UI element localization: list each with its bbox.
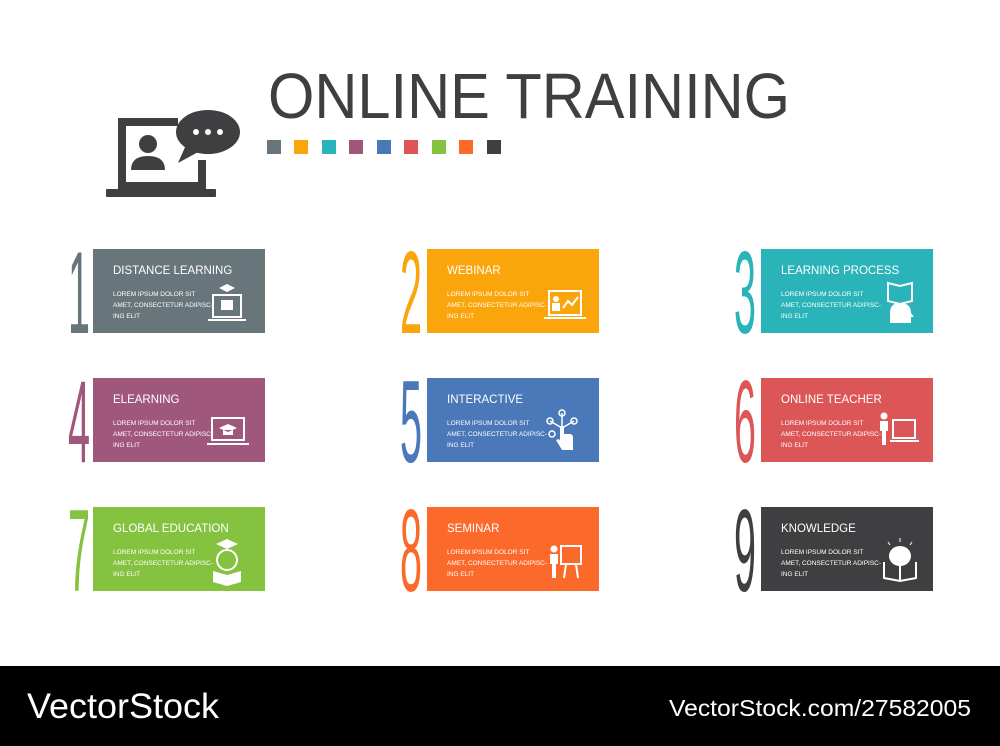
color squares legend bbox=[267, 140, 501, 154]
panel: 1 distance learning: ING ELIT bbox=[113, 313, 140, 320]
panel: 8 seminar bbox=[400, 485, 599, 616]
panel: 7 global education: LOREM IPSUM DOLOR SIT bbox=[113, 549, 195, 556]
panel: 8 seminar: ING ELIT bbox=[447, 571, 474, 578]
icon bbox=[547, 410, 577, 437]
panel: 7 global education: ING ELIT bbox=[113, 571, 140, 578]
panel: 5 interactive: AMET, CONSECTETUR ADIPISC- bbox=[447, 431, 547, 438]
footer bar bbox=[0, 666, 1000, 746]
panel: 1 distance learning: 1 bbox=[68, 227, 90, 358]
panel: 2 webinar: ING ELIT bbox=[447, 313, 474, 320]
panel: 4 elearning: ELEARNING bbox=[113, 394, 180, 406]
panel: 1 distance learning: AMET, CONSECTETUR ADIPISC- bbox=[113, 302, 213, 309]
panel: 6 online teacher: ONLINE TEACHER bbox=[781, 394, 882, 406]
panel: 1 distance learning bbox=[68, 227, 265, 358]
icon bbox=[888, 283, 912, 304]
icon bbox=[208, 295, 246, 320]
panel: 4 elearning: ING ELIT bbox=[113, 442, 140, 449]
panel: 7 global education: GLOBAL EDUCATION bbox=[113, 523, 229, 535]
panel: 9 knowledge: ING ELIT bbox=[781, 571, 808, 578]
panel: 3 learning process: 3 bbox=[734, 227, 756, 358]
panel: 9 knowledge: LOREM IPSUM DOLOR SIT bbox=[781, 549, 863, 556]
icon bbox=[544, 291, 586, 318]
panel: 3 learning process: LOREM IPSUM DOLOR SIT bbox=[781, 291, 863, 298]
panel: 9 knowledge bbox=[734, 485, 933, 616]
panel: 7 global education: AMET, CONSECTETUR ADIPISC- bbox=[113, 560, 213, 567]
panel: 4 elearning: AMET, CONSECTETUR ADIPISC- bbox=[113, 431, 213, 438]
panel: 1 distance learning: LOREM IPSUM DOLOR SIT bbox=[113, 291, 195, 298]
icon bbox=[207, 418, 249, 444]
panel: 2 webinar bbox=[400, 227, 599, 358]
panel: 4 elearning bbox=[68, 356, 265, 487]
panel: 7 global education bbox=[68, 485, 265, 616]
title: ONLINE TRAINING bbox=[268, 60, 790, 132]
panel: 2 webinar: 2 bbox=[400, 227, 422, 358]
panel: 8 seminar: AMET, CONSECTETUR ADIPISC- bbox=[447, 560, 547, 567]
panel: 9 knowledge: 9 bbox=[734, 485, 756, 616]
panel: 6 online teacher bbox=[734, 356, 933, 487]
panel: 3 learning process: AMET, CONSECTETUR ADIPISC- bbox=[781, 302, 881, 309]
panel: 5 interactive: LOREM IPSUM DOLOR SIT bbox=[447, 420, 529, 427]
panel: 5 interactive: 5 bbox=[400, 356, 422, 487]
panel: 7 global education: 7 bbox=[68, 485, 90, 616]
icon bbox=[890, 420, 919, 441]
panel: 8 seminar: LOREM IPSUM DOLOR SIT bbox=[447, 549, 529, 556]
panel: 6 online teacher: 6 bbox=[734, 356, 756, 487]
panel: 2 webinar: WEBINAR bbox=[447, 265, 501, 277]
panel: 6 online teacher: AMET, CONSECTETUR ADIPISC- bbox=[781, 431, 881, 438]
panel: 4 elearning: LOREM IPSUM DOLOR SIT bbox=[113, 420, 195, 427]
panel: 5 interactive: INTERACTIVE bbox=[447, 394, 523, 406]
panel: 6 online teacher: ING ELIT bbox=[781, 442, 808, 449]
panel: 4 elearning: 4 bbox=[68, 356, 90, 487]
footer bar: VectorStock.com/27582005 bbox=[669, 695, 971, 721]
panel: 3 learning process: ING ELIT bbox=[781, 313, 808, 320]
panel: 3 learning process: LEARNING PROCESS bbox=[781, 265, 900, 277]
panel: 1 distance learning: DISTANCE LEARNING bbox=[113, 265, 232, 277]
panel: 3 learning process bbox=[734, 227, 933, 358]
icon bbox=[216, 539, 238, 549]
panel: 2 webinar: AMET, CONSECTETUR ADIPISC- bbox=[447, 302, 547, 309]
panel: 8 seminar: 8 bbox=[400, 485, 422, 616]
panel: 9 knowledge: AMET, CONSECTETUR ADIPISC- bbox=[781, 560, 881, 567]
icon bbox=[561, 546, 581, 578]
panel: 5 interactive: ING ELIT bbox=[447, 442, 474, 449]
footer bar: VectorStock bbox=[27, 687, 220, 726]
panel: 2 webinar: LOREM IPSUM DOLOR SIT bbox=[447, 291, 529, 298]
panel: 8 seminar: SEMINAR bbox=[447, 523, 499, 535]
icon: laptop with chat bubble bbox=[106, 110, 240, 197]
panel: 5 interactive bbox=[400, 356, 599, 487]
panel: 9 knowledge: KNOWLEDGE bbox=[781, 523, 856, 535]
icon bbox=[889, 546, 911, 566]
panel: 6 online teacher: LOREM IPSUM DOLOR SIT bbox=[781, 420, 863, 427]
